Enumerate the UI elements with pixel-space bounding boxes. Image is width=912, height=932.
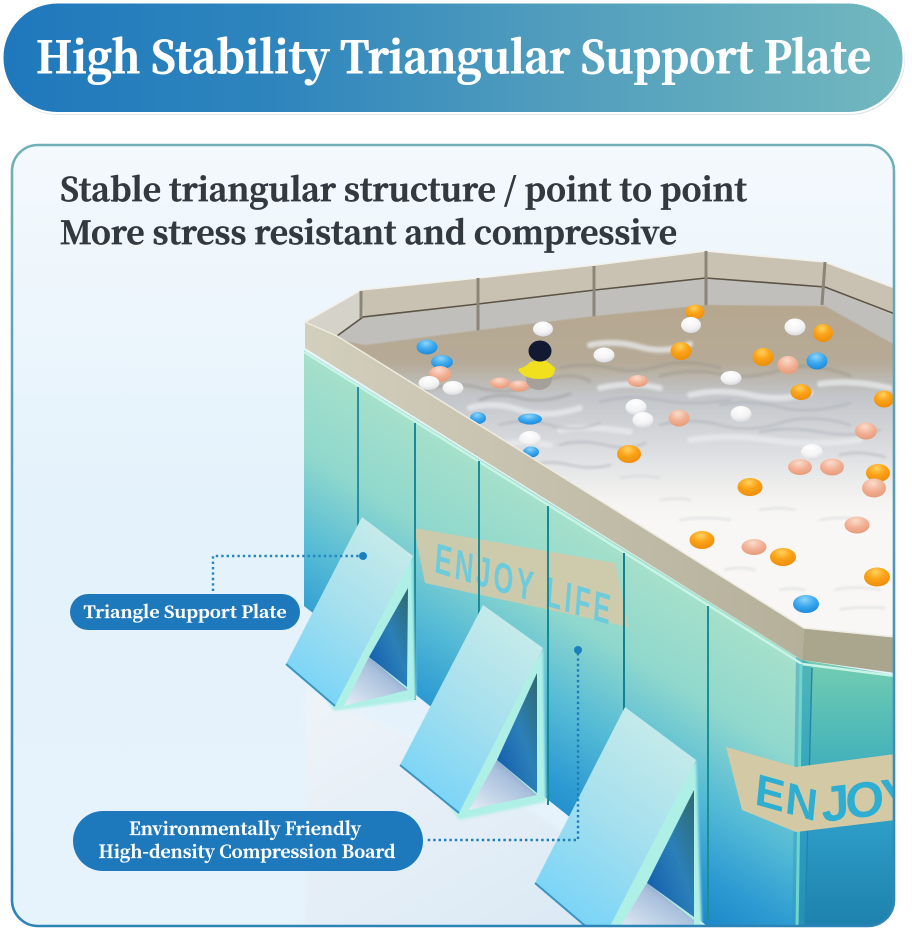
heading text	[60, 165, 747, 254]
callout: High-density Compression Board	[73, 811, 423, 871]
leader line: Compression Board	[427, 646, 582, 840]
pool wall panels	[304, 350, 895, 930]
ripples	[420, 343, 890, 610]
heading text: More stress resistant and compressive	[60, 208, 677, 254]
pool back wall	[304, 250, 893, 346]
banner text: ENJOY LIFE	[433, 535, 612, 634]
rubber duck figure	[518, 340, 555, 390]
panel seams	[358, 387, 812, 930]
triangle support plate 2	[400, 605, 546, 820]
callout: High-density Compression Board: High-density Compression Board	[98, 838, 396, 864]
title banner	[2, 2, 905, 115]
title text: High Stability Triangular Support Plate	[36, 22, 871, 86]
callout: Triangle Support Plate	[70, 594, 300, 630]
leader line: Triangle Support Plate	[213, 552, 367, 591]
banner: ENJOY LIFE	[414, 528, 629, 634]
banner text: JOY	[821, 766, 912, 833]
heading text: Stable triangular structure / point to point	[60, 165, 747, 211]
banner: ENJOY corner	[726, 747, 893, 832]
triangle support plate 1	[286, 517, 416, 711]
floor reflection	[310, 697, 582, 924]
triangle support plate 3	[535, 707, 702, 930]
balls	[416, 304, 894, 613]
pool rim	[305, 322, 895, 673]
callout: Triangle Support Plate: Triangle Support Plate	[84, 598, 287, 623]
banner text: EN	[753, 764, 820, 831]
panel top trim	[304, 352, 895, 676]
callout: High-density Compression Board: Environmentally Friendly	[129, 815, 362, 841]
water surface	[340, 305, 895, 636]
